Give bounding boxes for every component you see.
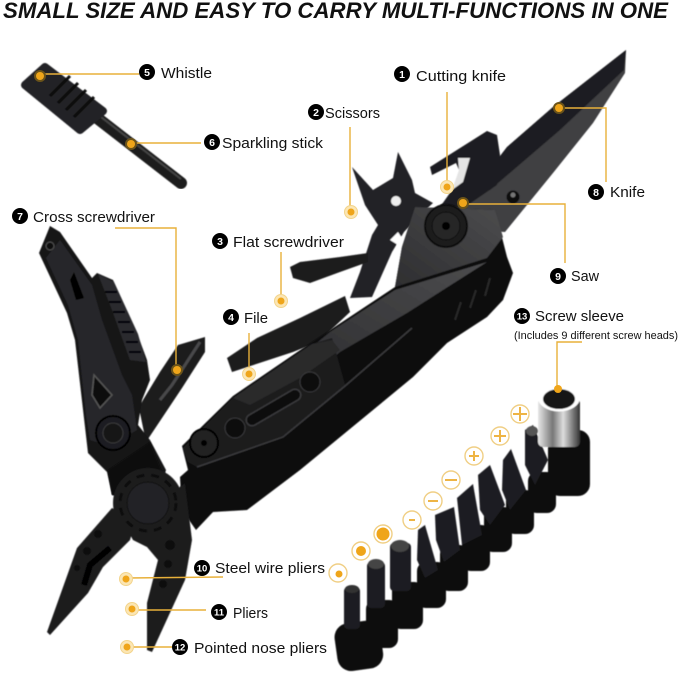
callout 9: saw (457, 197, 599, 285)
callout 8: knife: Knife (610, 184, 645, 201)
callout 11: pliers: Pliers (233, 605, 268, 622)
callout 12: pointed nose pliers: Pointed nose pliers (194, 640, 327, 657)
callout 1: cutting knife: 1 (399, 69, 405, 81)
callout 6: sparkling stick (125, 134, 324, 152)
callout 1: cutting knife (394, 66, 506, 194)
callout 4: file (223, 309, 268, 380)
callout 7: cross screwdriver: Cross screwdriver (33, 209, 155, 226)
callout 3: flat screwdriver: Flat screwdriver (233, 234, 344, 251)
callout 8: knife (553, 102, 645, 201)
callout 13: screw sleeve: 13 (517, 312, 527, 322)
callout 3: flat screwdriver: 3 (217, 236, 223, 248)
multi-tool: main handle (180, 205, 513, 530)
callout 12: pointed nose pliers (120, 639, 327, 657)
screw sleeve and bit set (333, 384, 590, 673)
callout 11: pliers (126, 602, 268, 622)
callout 5: whistle: 5 (144, 67, 150, 79)
callout 10: steel wire pliers (120, 560, 325, 586)
callout 6: sparkling stick: Sparkling stick (222, 135, 324, 152)
whistle and sparkling stick tool (25, 67, 181, 183)
callout 6: sparkling stick: 6 (209, 137, 215, 149)
callout 11: pliers: 11 (214, 608, 225, 618)
callout 13: screw sleeve: Screw sleeve (535, 308, 624, 325)
callout 10: steel wire pliers: 10 (197, 564, 207, 574)
callout 9: saw: Saw (571, 268, 599, 285)
callout 10: steel wire pliers: Steel wire pliers (215, 560, 325, 577)
callout 13: screw sleeve (514, 308, 678, 393)
callout 7: cross screwdriver (12, 208, 183, 376)
bit size icons (329, 405, 529, 582)
callout 7: cross screwdriver: 7 (17, 211, 23, 223)
callout 13: screw sleeve: (Includes 9 different screw heads) (514, 330, 678, 342)
callout 3: flat screwdriver (212, 233, 344, 308)
multi-tool: pliers head and jaws (47, 442, 192, 652)
callout 5: whistle: Whistle (161, 65, 212, 82)
callout 4: file: 4 (228, 312, 234, 324)
callout 8: knife: 8 (593, 187, 599, 199)
multi-tool: blades, scissors, file and flat screwdriver (227, 50, 626, 372)
callout 5: whistle (34, 64, 212, 82)
callout 1: cutting knife: Cutting knife (416, 68, 506, 85)
callout 9: saw: 9 (555, 271, 561, 283)
callout 12: pointed nose pliers: 12 (175, 642, 185, 654)
callout 2: scissors (308, 104, 380, 218)
callout 4: file: File (244, 310, 268, 327)
multi-tool: left arm with cross screwdriver (39, 226, 205, 495)
callout 2: scissors: 2 (313, 107, 319, 119)
callout 2: scissors: Scissors (325, 105, 380, 122)
